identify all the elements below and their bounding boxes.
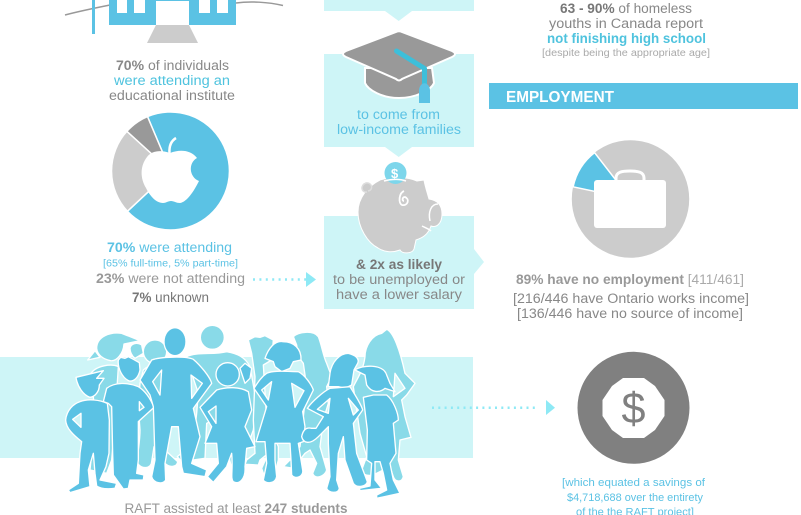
- text: unemployed or lower salary: & 2x as likely: [356, 257, 442, 272]
- text: employment figures: [513, 272, 749, 321]
- panel: top callout: [324, 0, 474, 21]
- text: attending an educational institute: [109, 58, 235, 103]
- chart: attendance pie with apple: [112, 112, 229, 230]
- icon: dollar coin: [578, 352, 690, 464]
- text: savings figure: [which equated a savings of: [562, 477, 706, 489]
- text: unemployed or lower salary: to be unemployed or: [333, 272, 466, 287]
- panel: unemployed or lower salary: [324, 162, 484, 309]
- text: low-income families: to come from: [357, 107, 440, 122]
- text: attendance breakdown: [65% full-time, 5% part-time]: [103, 258, 238, 270]
- text: employment figures: [216/446 have Ontario works income]: [513, 291, 749, 306]
- icon: apple: [142, 138, 199, 203]
- icon: piggy bank: [358, 162, 442, 253]
- text: homeless youths not finishing high school: not finishing high school: [547, 31, 706, 46]
- text: unemployed or lower salary: [333, 257, 466, 302]
- chart: employment pie with briefcase: [572, 140, 689, 258]
- icon: piggy bank: $: [391, 166, 399, 181]
- arrow: attendance to employment: [253, 272, 316, 287]
- panel: low-income families: [324, 31, 474, 157]
- text: attendance breakdown: 70% were attending: [107, 240, 232, 255]
- icon: dollar coin: $: [622, 384, 646, 433]
- panel: students band: [0, 357, 473, 458]
- text: low-income families: [337, 107, 461, 137]
- icon: school building: [65, 0, 283, 43]
- text: attendance breakdown: [96, 240, 245, 305]
- heading: employment: EMPLOYMENT: [506, 89, 614, 106]
- icon: graduation cap: [343, 31, 455, 103]
- text: low-income families: low-income families: [337, 122, 461, 137]
- text: attending an educational institute: educational institute: [109, 88, 235, 103]
- text: homeless youths not finishing high school: youths in Canada report: [549, 16, 703, 31]
- text: savings figure: $4,718,688 over the entirety: [567, 492, 703, 504]
- text: unemployed or lower salary: have a lower salary: [336, 287, 462, 302]
- text: homeless youths not finishing high school: [despite being the appropriate age]: [542, 48, 710, 59]
- illustration: group of students: [66, 325, 415, 498]
- heading: employment: [489, 83, 798, 109]
- text: employment figures: 89% have no employment [411/461]: [516, 272, 744, 287]
- text: homeless youths not finishing high school: [542, 1, 710, 59]
- text: attending an educational institute: were attending an: [113, 73, 230, 88]
- text: employment figures: [136/446 have no source of income]: [517, 306, 743, 321]
- text: homeless youths not finishing high school: 63 - 90% of homeless: [560, 1, 692, 16]
- text: attending an educational institute: 70% of individuals: [116, 58, 229, 73]
- icon: briefcase: [594, 171, 666, 228]
- text: attendance breakdown: 23% were not attending: [96, 271, 245, 286]
- arrow: students to savings: [432, 400, 555, 415]
- text: savings figure: [562, 477, 706, 515]
- text: attendance breakdown: 7% unknown: [132, 290, 209, 305]
